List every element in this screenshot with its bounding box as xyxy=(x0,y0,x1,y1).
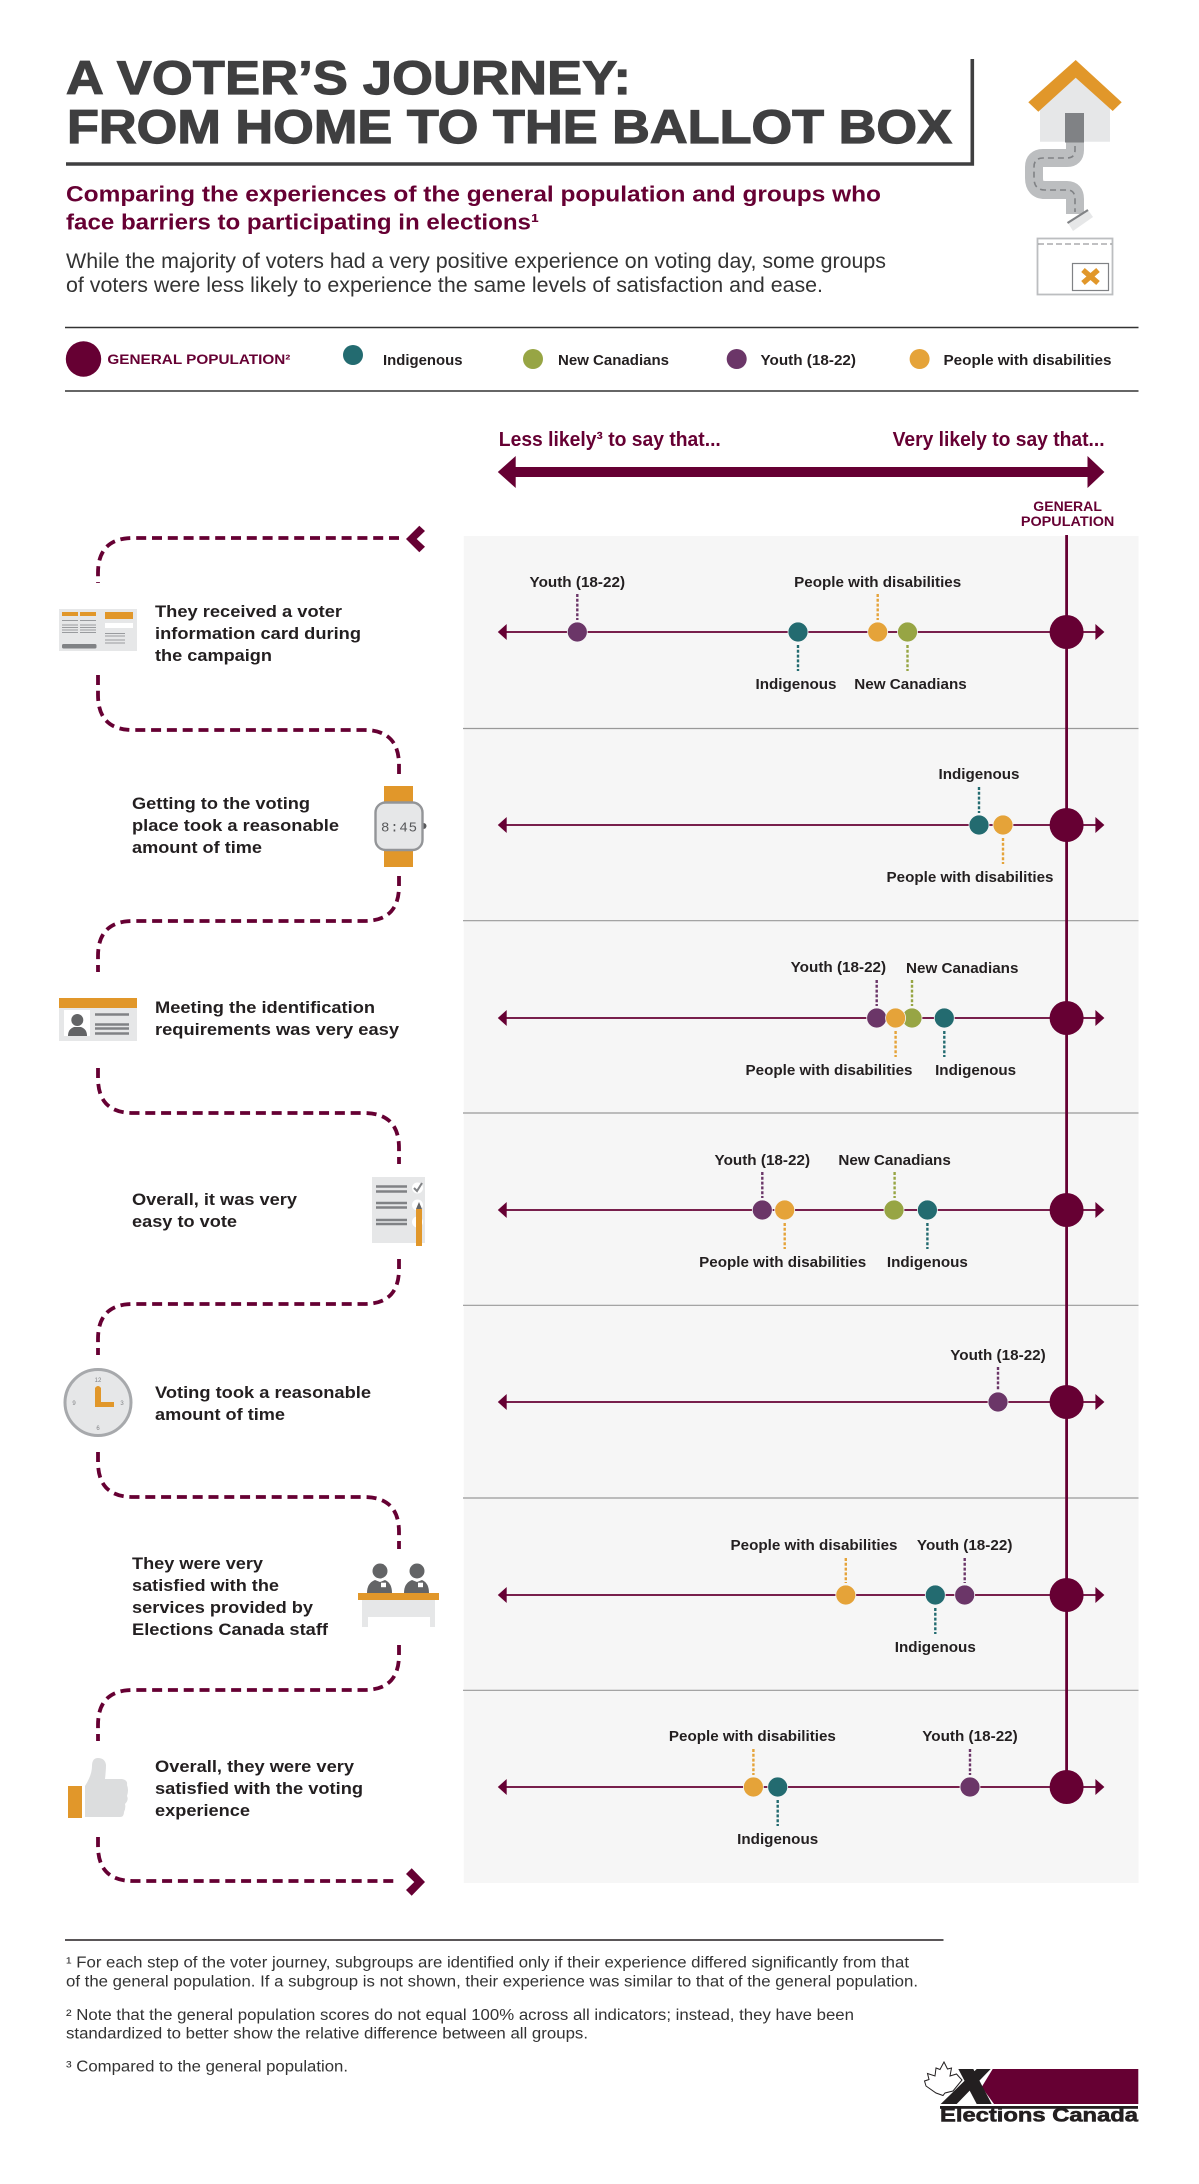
end chevron xyxy=(406,1868,425,1896)
panel: chart background xyxy=(463,536,1138,1883)
icon: clock: 9 xyxy=(72,1401,76,1407)
step 4 text xyxy=(132,1190,298,1231)
step 6 text xyxy=(132,1554,328,1639)
step 5 text: amount of time xyxy=(155,1405,285,1424)
step 2 text: place took a reasonable xyxy=(132,816,339,835)
logo: Elections Canada xyxy=(924,2062,1139,2127)
footnotes: ¹ For each step of the voter journey, subgroups are identified only if their experience differed significantly from that xyxy=(66,1955,910,1972)
footnotes: of the general population. If a subgroup is not shown, their experience was similar to that of the general population. xyxy=(66,1974,918,1991)
footnotes xyxy=(65,1940,944,2076)
chart row 6: satisfied with staff: Youth (18-22) xyxy=(917,1538,1013,1554)
intro text xyxy=(66,250,886,297)
footnotes: ³ Compared to the general population. xyxy=(66,2059,348,2076)
icon: house, road and ballot xyxy=(1028,60,1122,294)
step 1 text: the campaign xyxy=(155,646,272,665)
start chevron xyxy=(406,526,425,552)
step 7 text: Overall, they were very xyxy=(155,1757,355,1776)
step 2 text: Getting to the voting xyxy=(132,794,310,813)
chart row 3: identification requirements: People with disabilities xyxy=(746,1063,912,1079)
icon: staff at a desk xyxy=(358,1564,439,1627)
icon: clock: 6 xyxy=(96,1426,100,1432)
chart row 1: voter information card: Indigenous xyxy=(756,677,836,693)
chart row 6: satisfied with staff xyxy=(498,1538,1104,1656)
step 6 text: Elections Canada staff xyxy=(132,1620,328,1639)
legend: New Canadians xyxy=(558,353,669,369)
step 7 text: experience xyxy=(155,1801,250,1820)
chart row 4: overall easy to vote: Indigenous xyxy=(887,1255,968,1271)
chart row 1: voter information card: People with disabilities xyxy=(794,575,961,591)
step 5 text xyxy=(155,1383,371,1424)
chart row 5: voting took reasonable time: Youth (18-22) xyxy=(950,1348,1046,1364)
step 2 text: amount of time xyxy=(132,838,262,857)
chart row 6: satisfied with staff: Indigenous xyxy=(895,1640,976,1656)
step 7 text xyxy=(155,1757,363,1820)
scale header: less likely to very likely xyxy=(498,429,1105,488)
step 6 text: services provided by xyxy=(132,1598,314,1617)
step 6 text: satisfied with the xyxy=(132,1576,279,1595)
icon: voter information card xyxy=(59,609,137,651)
icon: clock: 12 xyxy=(95,1378,102,1384)
chart row 7: satisfied with voting experience: Indigenous xyxy=(737,1832,818,1848)
icon: clock: 3 xyxy=(120,1401,124,1407)
step 5 text: Voting took a reasonable xyxy=(155,1383,371,1402)
chart row 6: satisfied with staff: People with disabilities xyxy=(730,1538,898,1554)
step 2 text xyxy=(132,794,339,857)
icon: identification card xyxy=(59,998,137,1041)
chart row 3: identification requirements: Youth (18-22) xyxy=(791,960,886,976)
scale header: less likely to very likely: Very likely to say that... xyxy=(893,429,1105,451)
step 3 text: requirements was very easy xyxy=(155,1020,400,1039)
general population vertical line xyxy=(1065,535,1068,1787)
chart row 3: identification requirements: Indigenous xyxy=(935,1063,1016,1079)
chart row 1: voter information card: Youth (18-22) xyxy=(530,575,625,591)
footnotes: standardized to better show the relative difference between all groups. xyxy=(66,2026,588,2043)
logo: Elections Canada: Elections Canada xyxy=(940,2106,1139,2127)
step 1 text: They received a voter xyxy=(155,602,342,621)
chart row 4: overall easy to vote: Youth (18-22) xyxy=(715,1153,810,1169)
general population column heading: GENERAL xyxy=(1033,499,1102,514)
step 3 text xyxy=(155,998,400,1039)
chart row 7: satisfied with voting experience xyxy=(498,1729,1104,1848)
icon: wristwatch xyxy=(376,786,426,867)
chart row 4: overall easy to vote: People with disabilities xyxy=(699,1255,866,1271)
step 3 text: Meeting the identification xyxy=(155,998,375,1017)
intro text: of voters were less likely to experience the same levels of satisfaction and ease. xyxy=(66,274,823,297)
title xyxy=(66,51,972,164)
chart row 4: overall easy to vote xyxy=(498,1153,1104,1271)
subtitle xyxy=(66,182,881,234)
step 6 text: They were very xyxy=(132,1554,264,1573)
step 4 text: Overall, it was very xyxy=(132,1190,298,1209)
chart row 5: voting took reasonable time xyxy=(498,1348,1104,1419)
scale header: less likely to very likely: Less likely³ to say that... xyxy=(499,429,721,451)
chart row 7: satisfied with voting experience: Youth (18-22) xyxy=(922,1729,1018,1745)
icon: clock xyxy=(65,1370,131,1436)
subtitle: face barriers to participating in elections¹ xyxy=(66,210,539,234)
icon: checklist and pencil xyxy=(372,1177,425,1246)
step 1 text xyxy=(155,602,361,665)
general population column heading: POPULATION xyxy=(1021,514,1114,529)
chart row 1: voter information card: New Canadians xyxy=(854,677,967,693)
chart row 4: overall easy to vote: New Canadians xyxy=(838,1153,951,1169)
chart row 2: getting to the voting place: Indigenous xyxy=(938,767,1020,783)
chart row 2: getting to the voting place: People with disabilities xyxy=(886,870,1054,886)
journey dashed path xyxy=(98,538,399,1881)
icon: thumbs up xyxy=(68,1758,128,1818)
step 1 text: information card during xyxy=(155,624,361,643)
legend: People with disabilities xyxy=(944,353,1112,369)
subtitle: Comparing the experiences of the general population and groups who xyxy=(66,182,881,206)
chart row 7: satisfied with voting experience: People with disabilities xyxy=(669,1729,836,1745)
step 4 text: easy to vote xyxy=(132,1212,237,1231)
legend xyxy=(65,328,1138,391)
step 7 text: satisfied with the voting xyxy=(155,1779,363,1798)
legend: GENERAL POPULATION² xyxy=(107,352,291,367)
footnotes: ² Note that the general population scores do not equal 100% across all indicators; instead, they have been xyxy=(66,2007,854,2024)
chart row 2: getting to the voting place xyxy=(498,767,1104,886)
chart row 1: voter information card xyxy=(498,575,1104,693)
intro text: While the majority of voters had a very positive experience on voting day, some groups xyxy=(66,250,886,273)
general population column heading xyxy=(1021,499,1114,529)
title: A VOTER’S JOURNEY: xyxy=(66,51,631,104)
legend: Youth (18-22) xyxy=(760,353,856,369)
chart row 3: identification requirements: New Canadians xyxy=(906,961,1018,977)
legend: Indigenous xyxy=(383,353,462,369)
icon: wristwatch: 8:45 xyxy=(381,820,417,836)
chart row 3: identification requirements xyxy=(498,960,1104,1079)
title: FROM HOME TO THE BALLOT BOX xyxy=(67,100,952,153)
